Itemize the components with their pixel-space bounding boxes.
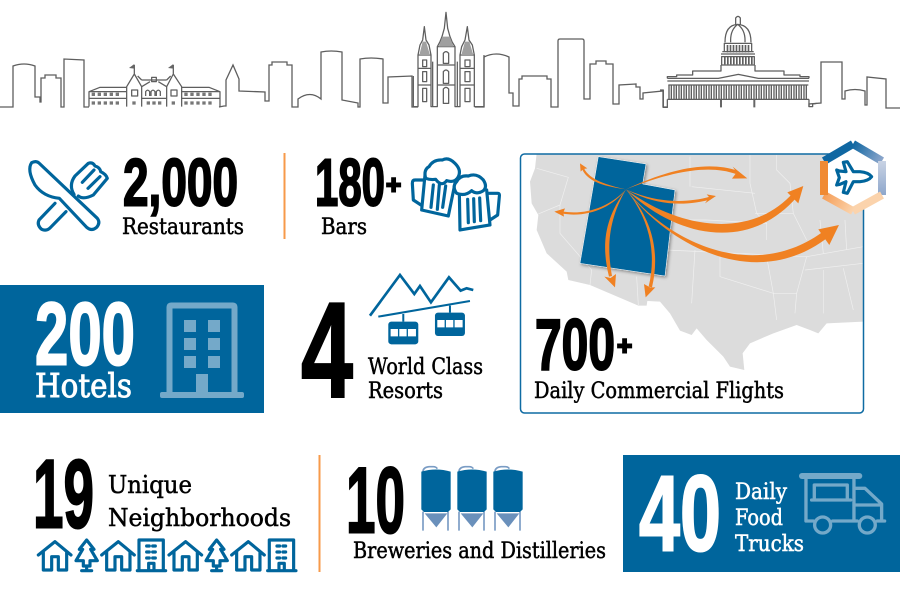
panel: food trucks [623,452,900,574]
panel: daily commercial flights [520,144,882,413]
icon: tank 2 [457,467,487,531]
number: 19 [33,440,94,548]
stat: 180+ bars [315,146,401,240]
number: 2,000 [123,146,238,220]
skyline outline left [0,39,900,108]
stat: 19 unique neighborhoods [33,440,296,571]
label: Unique [108,471,192,499]
icon: hotel building [160,306,244,398]
hotel building landmark [89,64,220,107]
icon: tank 3 [493,467,523,531]
skyline [0,12,900,108]
panel: hotels [0,284,264,413]
plus sign: + [386,170,401,200]
label: Hotels [35,366,132,405]
divider [284,153,286,239]
stat: 10 breweries and distilleries [346,448,606,564]
label: Daily [735,480,788,505]
plus sign: + [617,330,632,360]
icon: beer mugs [412,159,499,230]
panel background [0,285,264,413]
number: 10 [346,448,405,552]
number: 180 [315,146,385,220]
stat: 4 world class resorts [301,274,483,426]
icon: tank 1 [421,467,451,531]
capitol landmark [660,16,817,107]
temple landmark [413,12,484,107]
utah [580,157,675,276]
divider [318,455,320,572]
label line 2: Resorts [368,379,443,404]
icon: knife and fork [30,162,107,230]
label: World Class [368,355,483,380]
number: 4 [301,274,353,426]
panel background [623,455,900,572]
number: 700 [535,306,615,386]
icon: plane in hexagon [824,144,882,211]
label line 2: Neighborhoods [108,504,291,532]
number: 40 [639,452,721,574]
label: Restaurants [122,215,244,240]
map of western united states [530,153,863,370]
stat: 2,000 restaurants [122,146,244,240]
flight arrows [554,163,839,297]
label: Breweries and Distilleries [353,539,606,564]
map area [530,153,863,370]
panel frame [520,154,864,413]
label line 2: Food [735,506,783,531]
label: Daily Commercial Flights [534,379,784,404]
icon: food truck [802,476,885,533]
label: Bars [321,215,367,240]
icons: houses, trees and buildings [38,540,296,571]
number: 200 [35,284,135,384]
label line 3: Trucks [735,532,804,557]
icon: gondola and mountains [370,275,473,344]
